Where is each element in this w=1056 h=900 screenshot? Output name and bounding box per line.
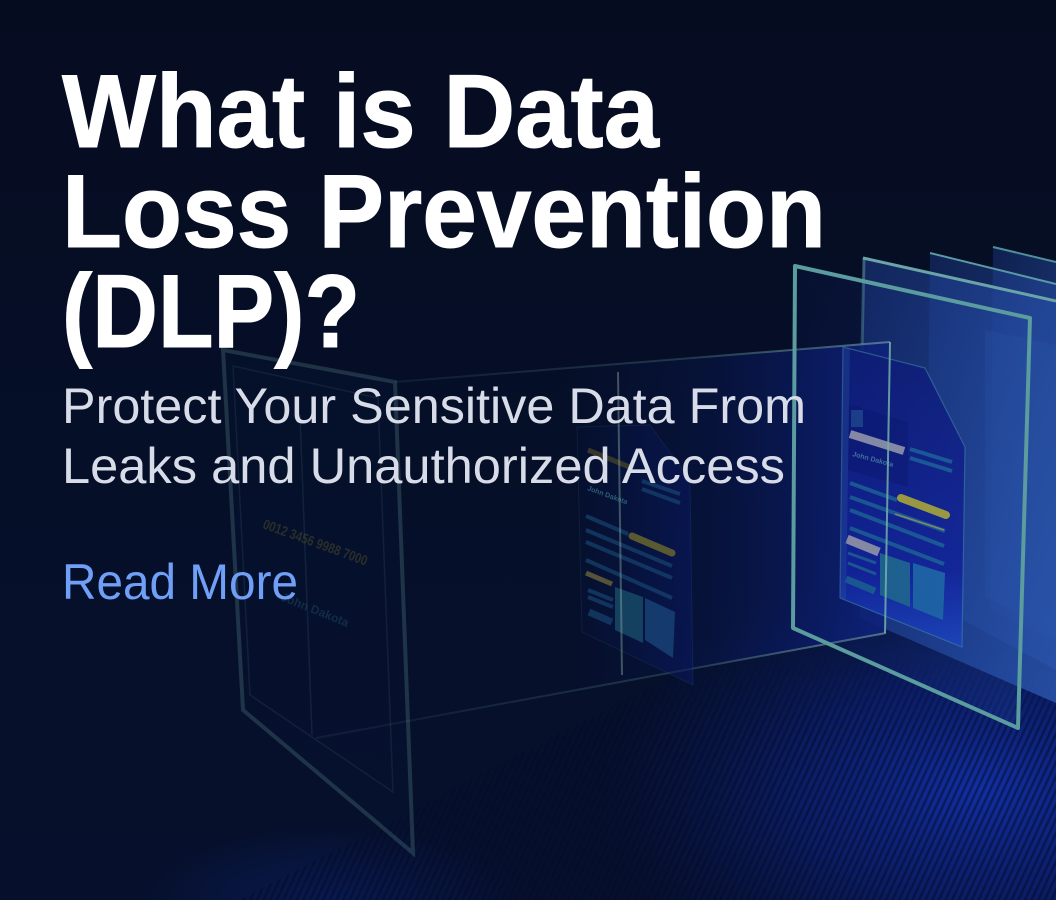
card number: 0012 3456 9988 7000 bbox=[261, 516, 370, 568]
front glass pane bbox=[793, 266, 1030, 728]
middle document card bbox=[577, 425, 693, 685]
holder name: John Dakota bbox=[851, 451, 894, 469]
grey bar 2 bbox=[847, 539, 879, 552]
foreground document card bbox=[840, 347, 965, 647]
grey bar bbox=[850, 434, 904, 451]
back glass panes bbox=[860, 247, 1056, 703]
left glass pane with faint credit card bbox=[223, 350, 413, 853]
title bbox=[62, 54, 826, 370]
middle frame vertical edge bbox=[618, 372, 622, 675]
title: What is Data bbox=[62, 54, 660, 170]
read more link: Read More bbox=[62, 554, 298, 610]
card text: John Dakota bbox=[586, 485, 628, 506]
floor glow and stripes bbox=[184, 630, 1056, 900]
title: (DLP)? bbox=[62, 254, 360, 370]
yellow highlight bbox=[901, 498, 946, 515]
card holder: John Dakota bbox=[279, 590, 351, 630]
subtitle: Leaks and Unauthorized Access bbox=[62, 438, 785, 494]
title: Loss Prevention bbox=[62, 154, 826, 270]
subtitle: Protect Your Sensitive Data From bbox=[62, 378, 806, 434]
yellow highlight bbox=[632, 536, 672, 553]
middle glass frame bbox=[316, 342, 890, 738]
chip bbox=[851, 410, 863, 427]
subtitle bbox=[62, 378, 806, 494]
